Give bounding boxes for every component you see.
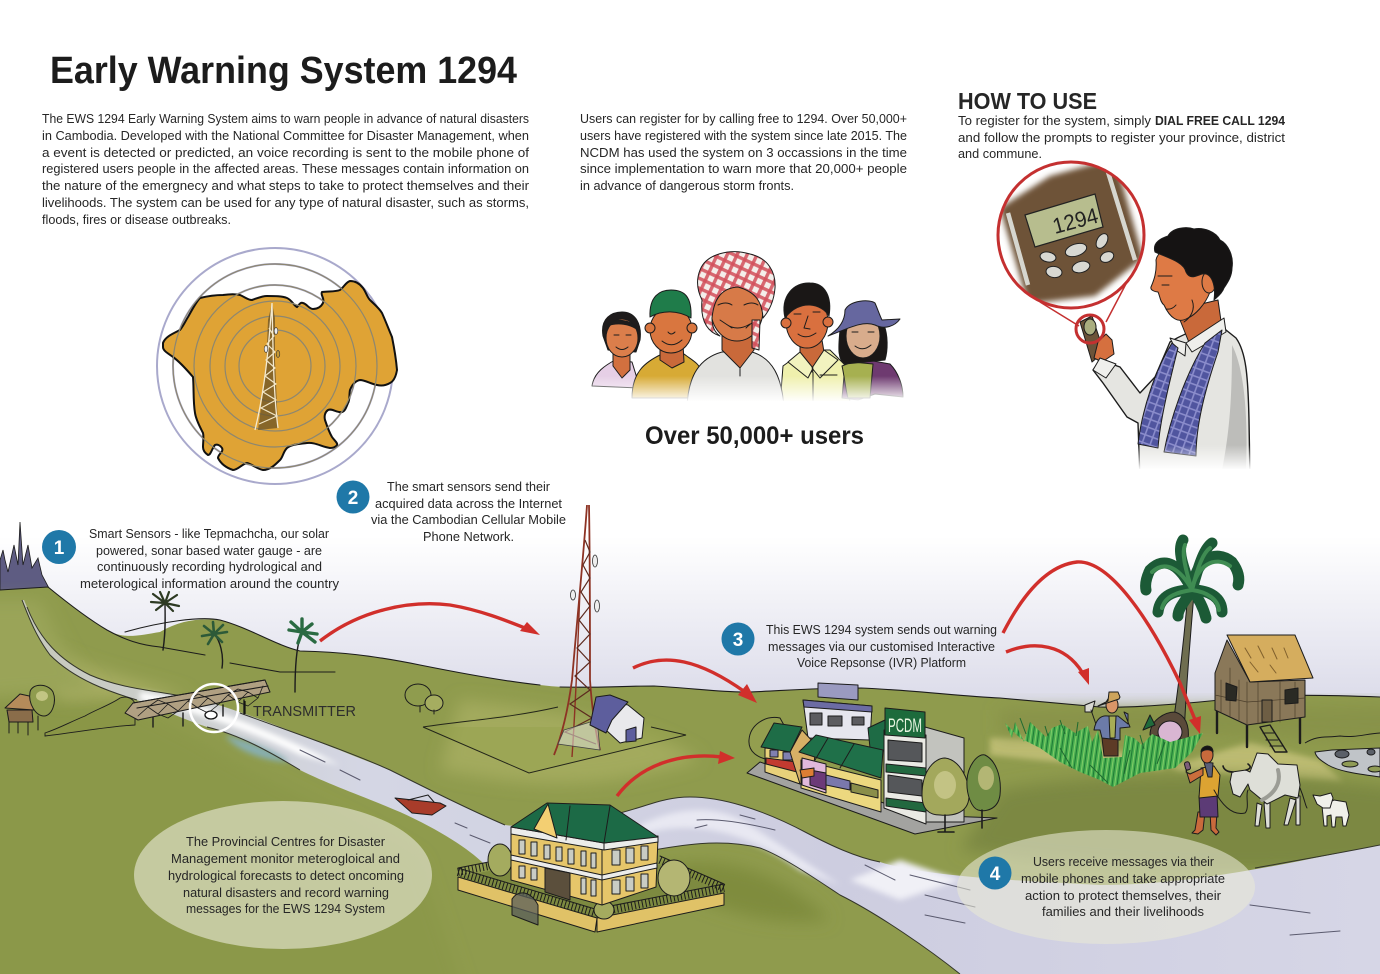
elder with checked krama <box>687 252 784 408</box>
users count label: Over 50,000+ users <box>645 422 864 450</box>
PCDM tower front <box>884 730 926 824</box>
step 2 text <box>371 480 566 544</box>
bridge <box>125 680 270 727</box>
green roof rear <box>868 720 888 752</box>
PCDM sign <box>885 708 925 738</box>
upper white building <box>803 683 872 740</box>
step 3 text: This EWS 1294 system sends out warning <box>766 623 997 637</box>
phone body <box>1000 158 1143 304</box>
step 1 text: continuously recording hydrological and <box>97 560 322 574</box>
step 1 text <box>80 527 340 591</box>
step 2 text: acquired data across the Internet <box>375 497 563 511</box>
cart wheel mound <box>1143 712 1188 743</box>
PCDM building block <box>747 683 1000 834</box>
palm tree with transmitter <box>289 619 317 692</box>
how to use text: DIAL FREE CALL 1294 <box>1155 114 1285 128</box>
provincial centre building <box>458 803 724 932</box>
intro paragraph: a event is detected or predicted, an voice recording is sent to the mobile phone of <box>42 146 530 160</box>
callout text: The Provincial Centres for Disaster <box>186 835 385 849</box>
hair <box>1154 228 1232 300</box>
step 2 <box>336 480 566 544</box>
palm fronds <box>1146 540 1239 618</box>
fade under villagers <box>580 376 915 411</box>
landscape <box>0 505 1380 974</box>
roof <box>511 803 658 843</box>
tower icon <box>255 303 280 430</box>
step 1 text: meterological information around the country <box>80 577 340 591</box>
badge 2 <box>336 480 370 514</box>
left tree <box>30 685 54 730</box>
pagoda <box>0 522 50 596</box>
step 2 text: via the Cambodian Cellular Mobile <box>371 513 566 527</box>
intro paragraph: in Cambodia. Developed with the National Committee for Disaster Management, when <box>42 129 529 143</box>
arrow: tower to PCDM <box>633 660 757 703</box>
users paragraph: in advance of dangerous storm fronts. <box>580 179 794 193</box>
ground <box>0 587 1380 974</box>
phone side rims <box>1008 172 1135 285</box>
left facade <box>511 830 602 905</box>
step 4 text: mobile phones and take appropriate <box>1021 872 1225 886</box>
badge 2: 2 <box>348 488 358 509</box>
badge 3: 3 <box>733 630 743 651</box>
magnifier ring and pointer <box>998 162 1144 343</box>
facial details <box>1158 276 1193 322</box>
callout: provincial centres <box>134 801 432 949</box>
how to use text: and commune. <box>958 147 1042 161</box>
neck <box>1176 300 1222 345</box>
step 4 text: families and their livelihoods <box>1042 905 1204 919</box>
small trees right of river <box>405 684 443 714</box>
sky backdrop <box>0 500 1380 760</box>
hill contour lines <box>0 587 1380 707</box>
PCDM tower side <box>925 727 964 822</box>
palm tree left <box>151 592 179 650</box>
callout text: natural disasters and record warning <box>183 886 389 900</box>
hand <box>1094 334 1114 362</box>
magnified phone showing 1294 <box>998 158 1144 343</box>
step 4 text <box>1021 855 1225 919</box>
step 4 <box>957 830 1255 944</box>
fence <box>458 856 724 932</box>
intro paragraph: The EWS 1294 Early Warning System aims to warn people in advance of natural disasters <box>42 112 529 126</box>
step 2 text: Phone Network. <box>423 530 514 544</box>
callout text: messages for the EWS 1294 System <box>186 902 385 916</box>
arrow: PCDM to phone user <box>1003 562 1201 734</box>
badge 1: 1 <box>54 538 65 559</box>
man with phone <box>1080 228 1260 483</box>
step 3 text: messages via our customised Interactive <box>768 640 995 654</box>
ear <box>1202 271 1216 293</box>
title: Early Warning System 1294 <box>50 50 517 92</box>
intro paragraph: floods, fires or disease outbreaks. <box>42 213 231 227</box>
ground shading <box>0 600 1380 974</box>
calf <box>1313 793 1349 827</box>
palm tree middle <box>202 622 227 668</box>
scarf <box>1138 343 1178 448</box>
users paragraph: Users can register for by calling free to 1294. Over 50,000+ <box>580 112 907 126</box>
zebu cow <box>1214 753 1307 828</box>
step 4 text: Users receive messages via their <box>1033 855 1214 869</box>
screen number: 1294 <box>1050 203 1101 239</box>
woman in pink <box>592 312 640 388</box>
water gauge sensor <box>205 711 217 719</box>
stilt hut <box>1215 635 1313 752</box>
entrance <box>545 868 570 900</box>
callout text: Management monitor meterogloical and <box>171 852 400 866</box>
river <box>22 600 1380 974</box>
inner signal rings <box>173 264 377 468</box>
middle shops <box>801 760 881 812</box>
man in pale yellow shirt <box>780 283 850 405</box>
badge 4: 4 <box>990 864 1001 885</box>
man in green cap <box>632 290 700 398</box>
woman in purple hat <box>828 301 903 400</box>
badge 4 <box>978 856 1012 890</box>
riverside bushes <box>45 697 135 736</box>
badge 1 <box>42 530 76 564</box>
group of five villagers <box>580 252 915 411</box>
gate <box>512 893 538 925</box>
arrow: PCDM to farmer <box>1006 646 1089 685</box>
sidewalk trees <box>922 755 1000 832</box>
side trees <box>488 844 512 876</box>
collar <box>1170 318 1226 356</box>
transmitter ring <box>190 684 238 732</box>
badge 3 <box>722 622 754 656</box>
step 4 bubble <box>957 830 1255 944</box>
back left tree <box>749 717 795 760</box>
PCDM sign label: PCDM <box>888 716 922 737</box>
head <box>1151 247 1211 320</box>
pond <box>1315 748 1380 777</box>
step 2 text: The smart sensors send their <box>387 480 550 494</box>
step 1 text: Smart Sensors - like Tepmachcha, our solar <box>89 527 329 541</box>
plot of land <box>423 707 686 773</box>
pond edge scrub <box>1305 733 1380 743</box>
step 3 <box>722 622 997 670</box>
fade under man <box>1130 445 1260 483</box>
transmitter label: TRANSMITTER <box>253 704 356 720</box>
outer signal rings <box>157 248 393 484</box>
intro paragraph: livelihoods. The system can be used for any type of natural disaster, such as storms, <box>42 196 529 210</box>
sidewalk <box>747 762 997 834</box>
step 3 text: Voice Repsonse (IVR) Platform <box>797 656 966 670</box>
person with phone <box>1184 746 1220 835</box>
shirt cuff <box>1093 358 1116 378</box>
arrow: sensors to tower <box>320 604 540 641</box>
rice paddy grass <box>1005 718 1203 787</box>
map of Cambodia <box>163 281 397 470</box>
white bands <box>511 827 658 880</box>
callout bubble <box>134 801 432 949</box>
left shack <box>5 694 34 735</box>
left shop <box>765 748 800 784</box>
phone screen <box>1025 194 1103 247</box>
cell tower <box>554 505 600 757</box>
how to use text: and follow the prompts to register your province, district <box>958 131 1286 145</box>
step 1 <box>42 527 340 591</box>
palm tree right <box>1146 540 1239 736</box>
shirt body and sleeve <box>1093 327 1250 480</box>
intro paragraph <box>42 112 530 227</box>
users paragraph: since implementation to warn more that 20,000+ people <box>580 162 907 176</box>
how to use text: To register for the system, simply <box>958 114 1152 128</box>
house by tower <box>590 695 644 743</box>
how to use text <box>958 114 1286 161</box>
boat <box>395 795 446 815</box>
users paragraph: NCDM has used the system on 3 occassions in the time <box>580 146 907 160</box>
Cambodia map with signal rings <box>157 248 397 484</box>
callout text: hydrological forecasts to detect oncoming <box>168 869 404 883</box>
palm trunk <box>1172 592 1194 736</box>
users paragraph: users have registered with the system since late 2015. The <box>580 129 907 143</box>
step 4 text: action to protect themselves, their <box>1025 889 1221 903</box>
intro paragraph: the nature of the emergnecy and what steps to take to protect themselves and their <box>42 179 529 193</box>
arrow: provincial centre to PCDM <box>617 751 735 796</box>
farmer <box>1085 692 1130 756</box>
right facade <box>602 838 658 905</box>
how to use heading: HOW TO USE <box>958 88 1097 114</box>
windows <box>519 840 648 896</box>
intro paragraph: registered users people in the affected areas. These messages contain information on <box>42 162 529 176</box>
phone <box>1080 316 1104 362</box>
transmitter post <box>244 701 246 714</box>
step 3 text <box>766 623 997 670</box>
step 1 text: powered, sonar based water gauge - are <box>96 544 322 558</box>
callout text <box>168 835 404 916</box>
users paragraph <box>580 112 907 193</box>
button cluster <box>1039 232 1115 279</box>
